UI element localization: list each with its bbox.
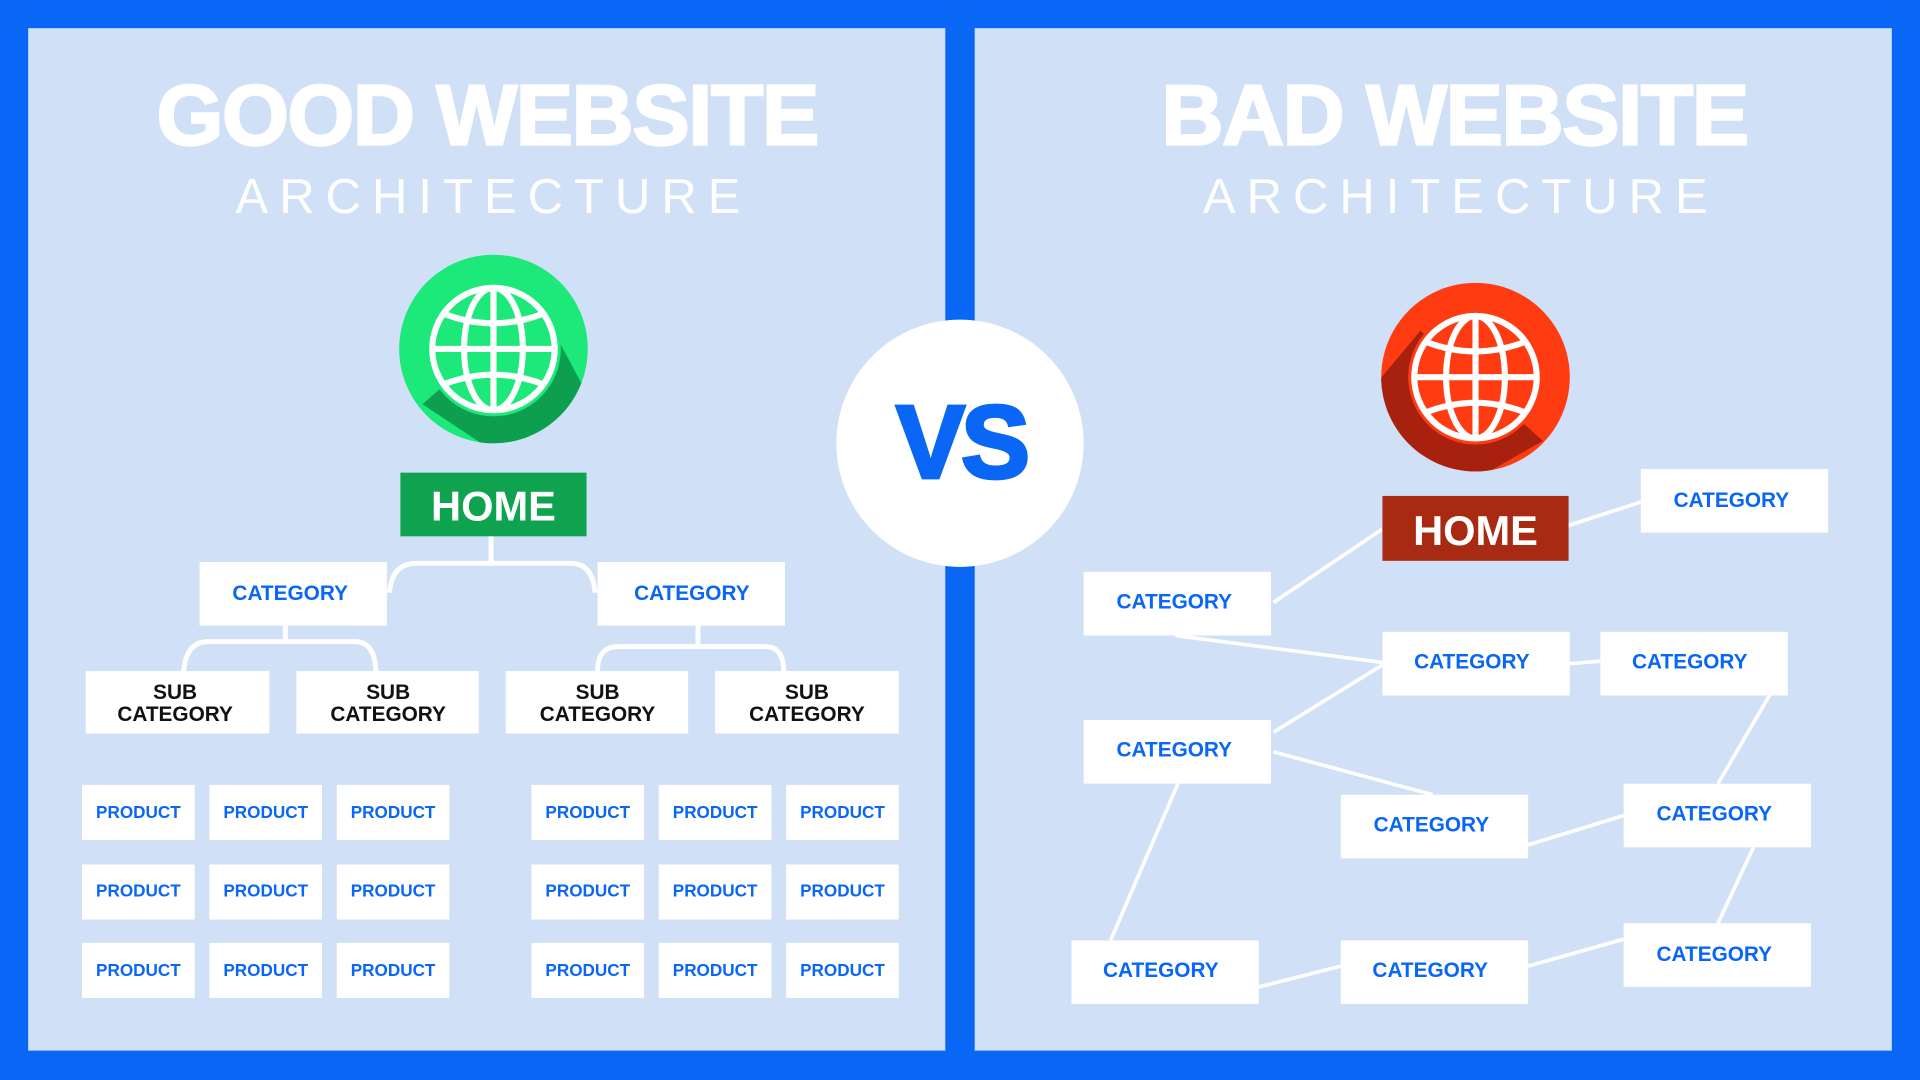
sub category boxes: SUB: [366, 681, 410, 704]
product grid: PRODUCT: [223, 802, 309, 822]
sub category boxes: CATEGORY: [330, 703, 446, 726]
product grid: PRODUCT: [223, 880, 309, 900]
title: good website: [157, 67, 818, 224]
product grid: PRODUCT: [96, 880, 181, 900]
title: bad website: ARCHITECTURE: [1203, 170, 1719, 224]
panel: bad website: [975, 28, 1892, 1051]
category boxes: CATEGORY: [1657, 943, 1772, 966]
panel: good website: [28, 28, 945, 1051]
product grid: PRODUCT: [545, 960, 631, 980]
category boxes: [1071, 469, 1828, 1004]
product grid: PRODUCT: [673, 960, 758, 980]
product grid: PRODUCT: [673, 880, 758, 900]
title: good website: GOOD WEBSITE: [157, 67, 818, 163]
product grid: PRODUCT: [673, 802, 758, 822]
category boxes: CATEGORY: [1632, 651, 1748, 674]
connectors: [184, 536, 784, 671]
product grid: PRODUCT: [351, 960, 436, 980]
title: bad website: [1161, 67, 1748, 224]
category boxes: CATEGORY: [1374, 813, 1489, 836]
product grid: PRODUCT: [800, 880, 885, 900]
sub category boxes: CATEGORY: [117, 703, 233, 726]
category boxes: [200, 562, 785, 626]
category boxes: CATEGORY: [232, 582, 348, 605]
product grid: PRODUCT: [545, 802, 631, 822]
product grid: PRODUCT: [545, 880, 631, 900]
category boxes: CATEGORY: [634, 582, 750, 605]
title: bad website: BAD WEBSITE: [1161, 67, 1748, 163]
product grid: PRODUCT: [351, 802, 436, 822]
product grid: PRODUCT: [96, 802, 181, 822]
product grid: PRODUCT: [351, 880, 436, 900]
icon: red globe: [1381, 282, 1570, 472]
sub category boxes: SUB: [576, 681, 620, 704]
category boxes: CATEGORY: [1117, 739, 1232, 762]
sub category boxes: [86, 671, 899, 733]
title: good website: ARCHITECTURE: [236, 170, 751, 224]
vs badge: [836, 320, 1084, 567]
product grid: PRODUCT: [800, 960, 885, 980]
product grid: [82, 785, 899, 998]
sub category boxes: SUB: [153, 681, 197, 704]
product grid: PRODUCT: [800, 802, 885, 822]
home box: [400, 473, 587, 536]
product grid: PRODUCT: [96, 960, 181, 980]
category boxes: CATEGORY: [1103, 959, 1219, 982]
category boxes: CATEGORY: [1674, 489, 1789, 512]
vs badge: VS: [896, 385, 1026, 500]
product grid: PRODUCT: [223, 960, 309, 980]
category boxes: CATEGORY: [1657, 802, 1772, 825]
sub category boxes: SUB: [785, 681, 829, 704]
sub category boxes: CATEGORY: [749, 703, 865, 726]
category boxes: CATEGORY: [1372, 959, 1488, 982]
category boxes: CATEGORY: [1414, 651, 1530, 674]
home box: HOME: [1413, 507, 1538, 554]
home box: [1382, 496, 1569, 561]
home box: HOME: [431, 482, 556, 529]
icon: green globe: [399, 254, 588, 444]
messy connectors: [1111, 502, 1769, 987]
category boxes: CATEGORY: [1117, 591, 1232, 614]
sub category boxes: CATEGORY: [540, 703, 655, 726]
